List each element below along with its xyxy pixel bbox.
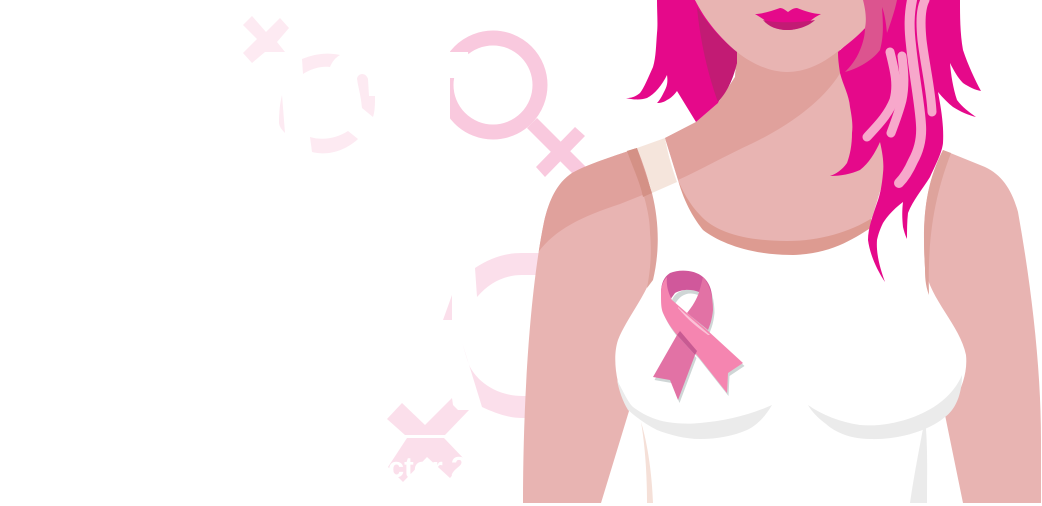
ribbon back loop <box>661 271 712 300</box>
text mask: large symbol <box>425 25 469 125</box>
dark hair under <box>697 7 737 102</box>
chest lower shade <box>678 100 872 255</box>
bust shadow left <box>617 380 772 439</box>
shoulder shadow <box>538 151 650 252</box>
bust shadow right <box>808 375 962 439</box>
awareness ribbon <box>653 271 744 403</box>
lower ring bottom arc <box>462 342 545 418</box>
hair strands <box>867 0 932 183</box>
side fold right <box>910 418 927 503</box>
neck shadow <box>665 50 845 180</box>
ribbon right loop <box>687 277 713 330</box>
ribbon hole shade <box>672 290 699 304</box>
lower ring left sliver <box>443 295 452 320</box>
white caption fragment: ctor 2 <box>388 452 467 484</box>
illustration <box>243 0 1041 503</box>
left hair <box>626 0 737 122</box>
ribbon shadow <box>654 280 744 403</box>
icon: lower cross <box>387 398 469 435</box>
lower ring top arc <box>475 253 545 297</box>
pale ring right piece <box>357 74 375 117</box>
ribbon fold <box>677 331 697 355</box>
hair highlight <box>845 0 897 72</box>
woman figure <box>520 0 1041 503</box>
face <box>695 0 866 72</box>
pale ring bottom arc <box>310 131 358 153</box>
lips <box>755 8 821 30</box>
pale ring left sliver <box>279 95 285 133</box>
ribbon left tail <box>653 335 695 400</box>
strap <box>637 138 677 193</box>
female symbol: lower pink <box>387 253 545 484</box>
pale ring top arc <box>302 54 340 74</box>
female symbol: large pink <box>425 25 600 191</box>
icon: pale cross <box>243 16 289 63</box>
left arm and shoulder <box>523 148 657 503</box>
right arm and shoulder <box>924 150 1041 503</box>
side fold left <box>641 422 653 503</box>
right hair <box>830 0 981 282</box>
female symbol: pale top left <box>243 16 375 153</box>
right armhole shade <box>924 150 951 295</box>
chest skin <box>665 50 890 241</box>
ribbon front band <box>661 277 743 393</box>
armhole shade <box>627 148 658 288</box>
ribbon highlight <box>678 307 710 335</box>
